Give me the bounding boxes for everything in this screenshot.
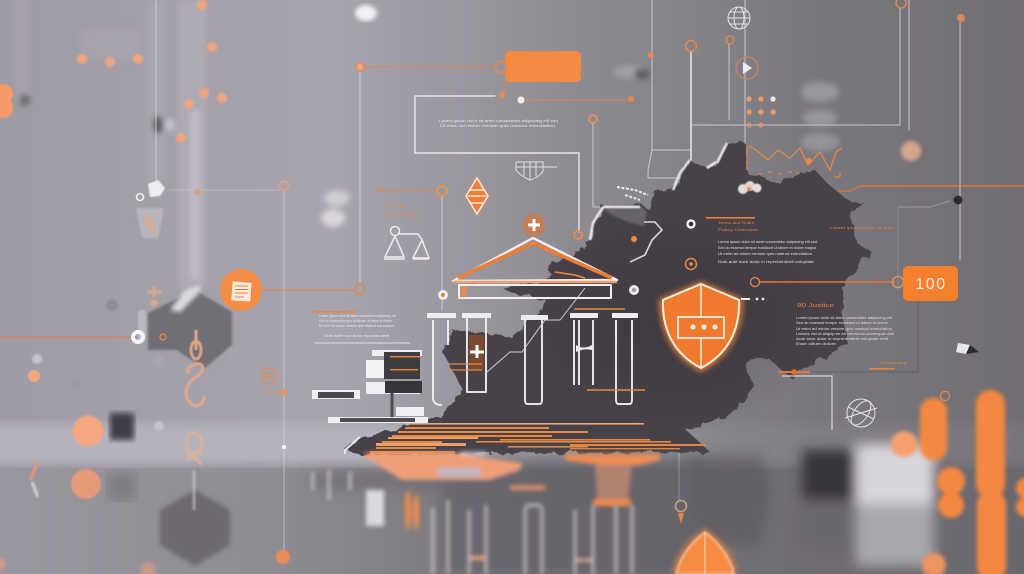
icon: orange diamond (464, 176, 490, 216)
left text block: Ut enim ad minim veniam quis nostrud exercitation (319, 324, 394, 328)
reflection on floor (310, 452, 770, 574)
icon: document in orange circle (220, 269, 262, 311)
small orange labels (385, 203, 418, 217)
central shield (659, 281, 764, 372)
left text block: Lorem ipsum dolor sit amet consectetur adipiscing elit (319, 314, 396, 318)
blurred foreground blocks right (800, 390, 1024, 574)
ring and drop reflection (676, 500, 686, 512)
left text block: Duis aute irure dolor reprehenderit (324, 334, 389, 338)
map text block: top (706, 217, 896, 264)
connector nodes (28, 0, 965, 390)
map text block: bottom: Laboris nisi ut aliquip ex ea commodo consequat duis (796, 332, 894, 336)
orange stripes at base of map (366, 423, 706, 458)
icon: globe top (728, 7, 750, 29)
left floating icons (136, 180, 165, 306)
left text block: Sed do eiusmod tempor incididunt ut labore et dolore (319, 319, 392, 323)
map text block: bottom: Summary (880, 360, 907, 365)
line chart on map (747, 146, 842, 177)
map text block: top: Policy Overview (718, 227, 758, 232)
map text block: bottom: Esse cillum dolore (796, 342, 836, 346)
text box: top caption: Lorem ipsum dolor sit amet consectetur adipiscing elit sed (439, 119, 558, 123)
icon: small circle badge (261, 368, 277, 384)
map text block: top: Lorem ipsum dolor sit amet consectetur adipiscing elit sed (718, 240, 817, 244)
reflected orange stripes (363, 452, 660, 506)
temple (427, 238, 645, 405)
hexagon with chain (138, 285, 232, 566)
map text block: bottom (778, 303, 907, 430)
icon: globe bottom right (845, 398, 877, 428)
text box: top caption (439, 119, 558, 128)
100 tag: 100 (915, 276, 947, 293)
100 tag (760, 266, 958, 301)
blurred foreground left (0, 413, 290, 574)
icon: plus badge above roof (523, 214, 545, 236)
reflected columns (433, 500, 632, 574)
map text block: top: Duis aute irure dolor in reprehenderit voluptate (718, 260, 814, 264)
blurred background shapes (0, 0, 921, 290)
columns (433, 318, 632, 405)
map text block: bottom: 90 Justice (797, 303, 834, 309)
small orange labels: Terms Policy (387, 212, 418, 217)
icon: play button (736, 57, 758, 79)
icon: coin cluster on map (738, 181, 762, 194)
map text block: top: Ut enim ad minim veniam quis nostrud exercitation (718, 252, 812, 256)
dark map (345, 143, 872, 455)
icon: scales (384, 226, 429, 259)
map text block: top: Lorem ipsum dolor sit amet (830, 225, 896, 230)
stair line on map (487, 288, 585, 372)
orange label pill (505, 51, 581, 82)
map text block: bottom: Lorem ipsum dolor sit amet consectetur adipiscing elit (796, 316, 892, 320)
connector dot (281, 389, 287, 395)
text box: top caption: Ut enim ad minim veniam quis nostrud exercitation (440, 124, 555, 128)
dot grid (746, 96, 776, 128)
map text block: top: Terms and Rules (718, 220, 754, 225)
small orange labels: Law Rule (385, 203, 406, 208)
left text block (313, 311, 410, 343)
icon: small stacked books (312, 350, 428, 423)
map text block: bottom: Ut enim ad minim veniam quis nostrud exercitation (796, 327, 892, 331)
icon: small shield banner (516, 162, 557, 180)
map text block: top: Sed do eiusmod tempor incididunt ut labore et dolore magna (718, 246, 817, 250)
icon: reflected shield (672, 528, 738, 574)
small cube right (956, 343, 979, 354)
map text block: bottom: Sed do eiusmod tempor incididunt ut labore et dolore (796, 321, 888, 325)
map text block: bottom: Aute irure dolor in reprehenderit voluptate velit (796, 337, 888, 341)
